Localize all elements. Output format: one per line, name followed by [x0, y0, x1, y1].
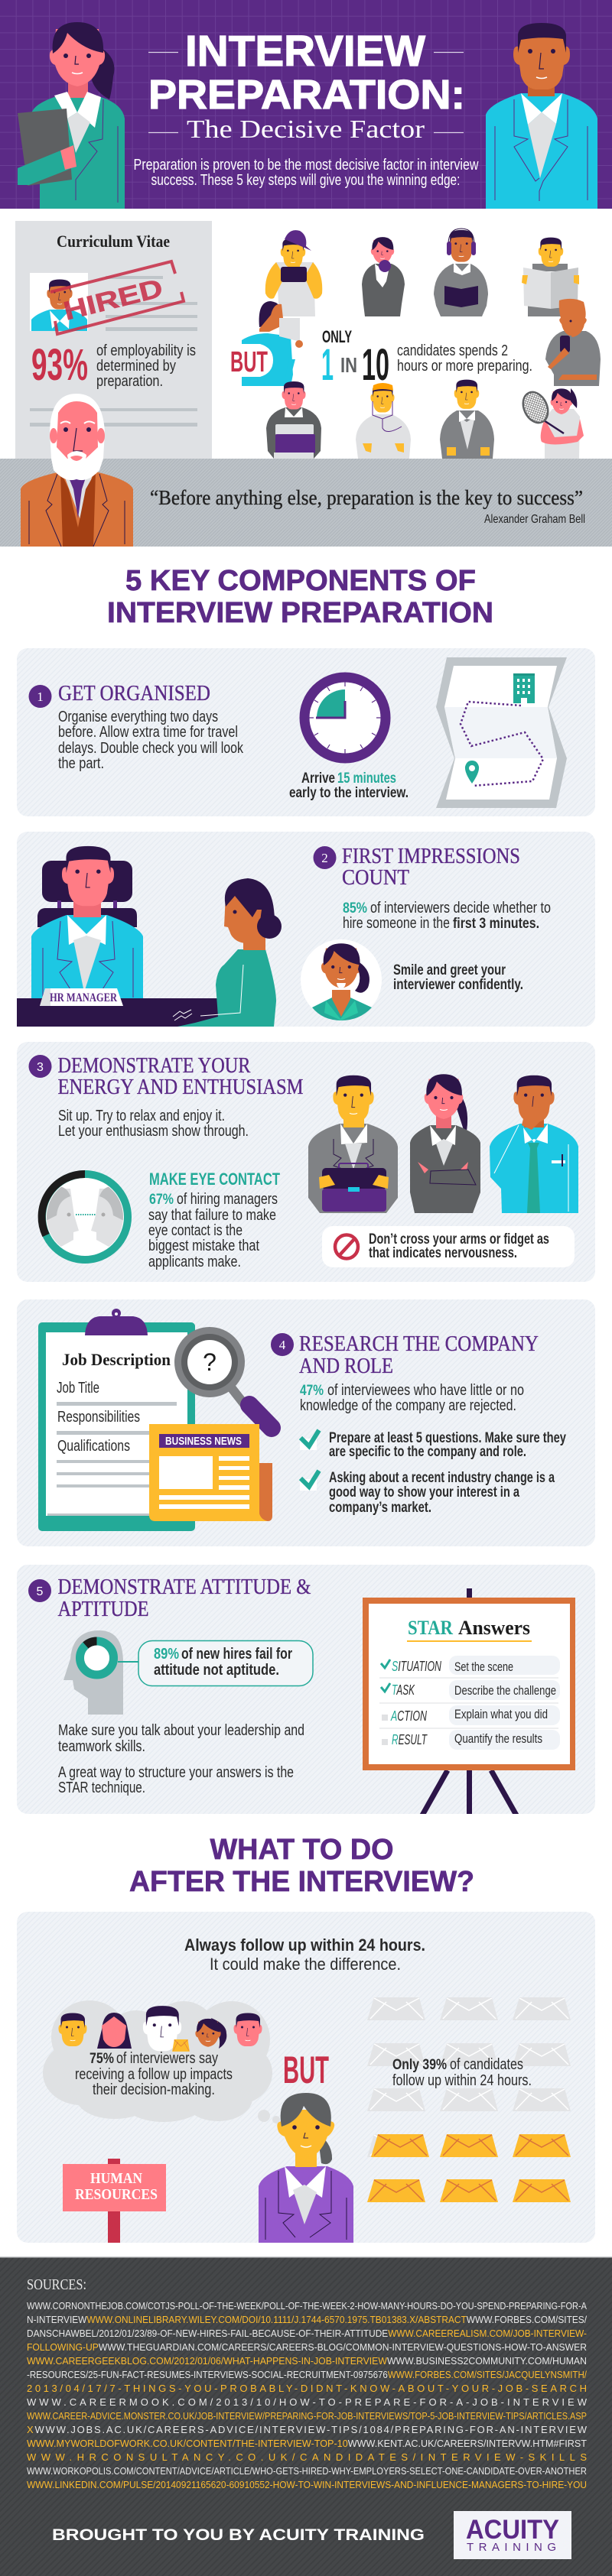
- clipboard: Job Title: [57, 1380, 99, 1397]
- title: INTERVIEW: [185, 27, 425, 76]
- map illustration: [436, 657, 567, 808]
- body text: Let your enthusiasm show through.: [58, 1123, 249, 1140]
- stat text: [343, 900, 551, 932]
- badge 5: [28, 1579, 51, 1602]
- source links: WWW.MYWORLDOFWORK.CO.UK/CONTENT/THE-INTERVIEW-TOP-10WWW.KENT.AC.UK/CAREERS/INTERVW.HTM#FIRST: [27, 2438, 587, 2449]
- nameplate: [40, 988, 123, 1006]
- star heading: Answers: [458, 1617, 530, 1639]
- stat: 39 percent: [392, 2056, 532, 2089]
- footer: sources: [0, 2256, 612, 2576]
- check: recent industry change: [300, 1471, 319, 1491]
- stat text: 85%: [343, 900, 367, 917]
- body text: [58, 1108, 249, 1140]
- face: orange woman: [195, 2018, 226, 2049]
- icon: no sign: [335, 1235, 358, 1258]
- person with tablet: [265, 230, 322, 316]
- quote band: [0, 394, 612, 547]
- badge 3: [29, 1055, 52, 1078]
- badge 2: 2: [321, 851, 328, 865]
- tip text: Smile and greet your: [393, 962, 506, 978]
- stat: only 1 in 10: ONLY: [322, 327, 352, 346]
- eye contact text: say that failure to make: [148, 1207, 276, 1224]
- portrait: alexander graham bell: [21, 394, 133, 547]
- panel: research the company: [17, 1299, 595, 1546]
- woman with microphone: [362, 237, 405, 316]
- stat: only 1 in 10: candidates spends 2: [397, 342, 508, 359]
- easel with star answers: [363, 1588, 575, 1819]
- row: action: ACTION: [390, 1708, 428, 1724]
- stat: 93 percent: determined by: [96, 358, 176, 375]
- magnifying glass: ?: [203, 1348, 216, 1376]
- thought bubble: [43, 2000, 280, 2123]
- logo: acuity training: ACUITY: [466, 2515, 559, 2545]
- body text: Make sure you talk about your leadership and: [58, 1722, 304, 1739]
- callout: don't cross your arms: that indicates nervousness.: [369, 1245, 517, 1261]
- stat text: knowledge of the company are rejected.: [300, 1397, 516, 1414]
- body text: [58, 1722, 304, 1796]
- callout: 89 percent: 89%: [154, 1646, 179, 1663]
- face: pink man: [234, 2013, 262, 2046]
- body text: STAR technique.: [58, 1780, 145, 1796]
- panel: follow up: [17, 1912, 595, 2243]
- source links: 2013/04/17/7-THINGS-YOU-PROBABLY-DIDNT-KNOW-ABOUT-YOUR-JOB-SEARCH: [27, 2383, 587, 2394]
- bubble text: their decision-making.: [93, 2081, 215, 2098]
- man with apron and case: [266, 381, 321, 459]
- bubble text: [75, 2050, 233, 2098]
- face: central man: [143, 2006, 181, 2051]
- stat: only 1 in 10: 10: [362, 340, 389, 390]
- newspaper: [149, 1424, 272, 1521]
- row: situation: Set the scene: [454, 1659, 513, 1674]
- body text: Organise everything two days: [58, 709, 218, 725]
- eye contact text: MAKE EYE CONTACT: [149, 1170, 280, 1189]
- heading: DEMONSTRATE YOUR: [58, 1054, 251, 1078]
- source links: N-INTERVIEWWWW.ONLINELIBRARY.WILEY.COM/DOI/10.1111/J.1744-6570.1975.TB01383.X/ABSTRACTWWW.FORBES.COM/SITES/: [27, 2314, 587, 2325]
- nameplate: HR MANAGER: [50, 991, 117, 1004]
- candidate photo: [30, 273, 88, 331]
- badge 4: [271, 1333, 294, 1356]
- stat text: 47%: [300, 1383, 324, 1399]
- heading: what to do after: AFTER THE INTERVIEW?: [129, 1866, 474, 1898]
- panel: attitude and aptitude: [17, 1565, 595, 1819]
- heading: [58, 1054, 304, 1099]
- lead text: [184, 1935, 425, 1974]
- stat: 93 percent: of employability is: [96, 342, 196, 359]
- tip text one: are specific to the company and role.: [329, 1444, 526, 1460]
- sign: human resources: RESOURCES: [75, 2186, 158, 2203]
- face: yellow: [58, 2013, 87, 2046]
- stat: 93 percent: [31, 340, 196, 390]
- magnifying glass: [174, 1327, 272, 1428]
- man with stethoscope: [356, 383, 411, 459]
- badge 1: 1: [37, 689, 44, 704]
- panel: energy and enthusiasm: [17, 1042, 595, 1282]
- heading: AND ROLE: [299, 1355, 393, 1378]
- cutout: but: BUT: [230, 346, 268, 378]
- man reading document: [230, 301, 303, 386]
- clipboard: [38, 1309, 195, 1531]
- intro paragraph: Preparation is proven to be the most decisive factor in interview: [133, 157, 479, 174]
- credit line: BROUGHT TO YOU BY ACUITY TRAINING: [52, 2526, 425, 2544]
- heading: 5 key components: 5 KEY COMPONENTS OF: [125, 565, 476, 597]
- heading: [58, 1575, 311, 1621]
- bubble text: of interviewers say: [116, 2050, 218, 2067]
- heading: what to do after: WHAT TO DO: [210, 1834, 393, 1866]
- stat: 93 percent: preparation.: [96, 373, 163, 390]
- star heading: STAR: [408, 1617, 453, 1639]
- bubble text: 75%: [90, 2051, 114, 2067]
- badge 2: [314, 846, 337, 869]
- row: result: [392, 1731, 542, 1747]
- heading: COUNT: [342, 866, 409, 890]
- clipboard: Job Description: [62, 1350, 171, 1369]
- body text: Sit up. Try to relax and enjoy it.: [58, 1108, 225, 1124]
- body text: delays. Double check you will look: [58, 740, 244, 757]
- callout: don't cross your arms: [322, 1226, 575, 1267]
- clipboard: Qualifications: [57, 1438, 130, 1455]
- stat: 93 percent: 93%: [31, 340, 88, 390]
- panel: get organised: [17, 648, 595, 816]
- quote text: “Before anything else, preparation is the key to success”: [150, 486, 583, 509]
- illustration: nervous candidate: [173, 878, 282, 1027]
- stat: 39 percent: of candidates: [450, 2056, 523, 2073]
- tip text one: [329, 1430, 566, 1460]
- clock icon: [304, 677, 386, 758]
- source links: WWW.CAREERMOOK.COM/2013/10/HOW-TO-PREPARE-FOR-A-JOB-INTERVIEW: [27, 2396, 588, 2408]
- heading: GET ORGANISED: [58, 682, 210, 706]
- heading: APTITUDE: [58, 1598, 148, 1621]
- heading: 5 key components: INTERVIEW PREPARATION: [107, 597, 493, 629]
- eye contact text: of hiring managers: [177, 1191, 278, 1208]
- row: result: Quantify the results: [454, 1731, 542, 1746]
- sign: human resources: HUMAN: [90, 2170, 142, 2187]
- row: task: [392, 1682, 556, 1698]
- intro paragraph: [133, 157, 479, 189]
- stat text: of interviewers decide whether to: [370, 900, 551, 917]
- quote attribution: Alexander Graham Bell: [484, 513, 585, 526]
- stamp: hired: [50, 261, 184, 334]
- heading: [299, 1332, 539, 1378]
- callout: 89 percent: of new hires fail for: [181, 1646, 292, 1663]
- tip text: [393, 962, 523, 993]
- source links: WWW.CAREERGEEKBLOG.COM/2012/01/06/WHAT-HAPPENS-IN-JOB-INTERVIEWWWW.BUSINESS2COMMUNITY.COM/HUMAN: [27, 2355, 587, 2367]
- star heading: [407, 1617, 532, 1642]
- stat text: hire someone in the: [343, 915, 450, 932]
- check: prepare questions: [300, 1430, 319, 1450]
- tip text two: [329, 1470, 555, 1516]
- clipboard: Responsibilities: [57, 1409, 140, 1426]
- illustration: woman with crossed arms: [410, 1074, 480, 1213]
- label: but: BUT: [283, 2049, 329, 2091]
- envelopes grid: [367, 1997, 571, 2202]
- man with headphones and book: [434, 229, 488, 316]
- body text: A great way to structure your answers is the: [58, 1764, 294, 1781]
- illustration: man with briefcase: [308, 1075, 398, 1213]
- heading: ENERGY AND ENTHUSIASM: [58, 1075, 304, 1099]
- clock caption: Arrive: [301, 771, 335, 787]
- clock caption: early to the interview.: [289, 785, 409, 801]
- face: pink woman: [97, 2013, 132, 2049]
- bubble text: receiving a follow up impacts: [75, 2066, 233, 2083]
- stat: only 1 in 10: hours or more preparing.: [397, 358, 532, 375]
- panel: curriculum vitae: [15, 221, 212, 459]
- location pin: [465, 761, 479, 784]
- heading: RESEARCH THE COMPANY: [299, 1332, 539, 1356]
- woman with tennis racket: [519, 388, 584, 459]
- intro paragraph: success. These 5 key steps will give you the winning edge:: [151, 172, 461, 189]
- stat text: first 3 minutes.: [453, 916, 539, 932]
- sign: human resources: [63, 2159, 166, 2243]
- illustration: hr manager: [31, 846, 143, 1001]
- panel: first impressions: [17, 832, 595, 1027]
- desk: [17, 998, 219, 1027]
- eye contact text: [148, 1170, 280, 1270]
- header banner: [0, 0, 612, 209]
- heading: DEMONSTRATE ATTITUDE &: [58, 1575, 311, 1599]
- eye contact text: 67%: [149, 1192, 174, 1208]
- tip text two: good way to show your interest in a: [329, 1484, 519, 1501]
- illustration: man in blue suit: [486, 23, 597, 209]
- row: task: TASK: [392, 1682, 415, 1698]
- illustration: thoughtful man: [490, 1075, 578, 1213]
- eye contact text: biggest mistake that: [148, 1238, 259, 1254]
- title: The Decisive Factor: [187, 115, 425, 144]
- callout: don't cross your arms: Don’t cross your arms or fidget as: [369, 1231, 549, 1247]
- illustration: thinking woman: [259, 2093, 353, 2243]
- stat: only 1 in 10: 1: [321, 340, 334, 390]
- illustration: smiling candidate: [301, 939, 382, 1020]
- heading: [342, 845, 520, 890]
- stat text: of interviewees who have little or no: [327, 1382, 524, 1399]
- logo: acuity training: [454, 2511, 571, 2559]
- lead text: Always follow up within 24 hours.: [184, 1935, 425, 1955]
- source links: WWW.HRCONSULTANCY.CO.UK/CANDIDATES/INTERVIEW-SKILLS: [27, 2451, 587, 2463]
- source links: -RESOURCES/25-FUN-FACT-RESUMES-INTERVIEWS-SOCIAL-RECRUITMENT-0975676WWW.FORBES.COM/SITES/JACQUELYNSMITH/: [27, 2369, 587, 2380]
- source links: XWWW.JOBS.AC.UK/CAREERS-ADVICE/INTERVIEW-TIPS/1084/PREPARING-FOR-AN-INTERVIEW: [27, 2424, 588, 2435]
- tip text two: company’s market.: [329, 1500, 431, 1516]
- newspaper: BUSINESS NEWS: [165, 1435, 242, 1448]
- illustration: crowd of candidates: [230, 229, 601, 459]
- source links: [27, 2300, 588, 2490]
- heading: sources: SOURCES:: [27, 2276, 86, 2293]
- row: task: Describe the challenge: [454, 1683, 556, 1698]
- clock caption: [289, 771, 409, 801]
- eye contact chart: [42, 1174, 128, 1261]
- stat: 39 percent: follow up within 24 hours.: [392, 2072, 532, 2089]
- stat text: [300, 1382, 524, 1414]
- lead text: It could make the difference.: [210, 1955, 401, 1974]
- title: [148, 27, 465, 144]
- body text: before. Allow extra time for travel: [58, 724, 238, 741]
- source links: DANSCHAWBEL/2012/01/23/89-OF-NEW-HIRES-FAIL-BECAUSE-OF-THEIR-ATTITUDEWWW.CAREEREALISM.COM/JOB-INTERVIEW-: [27, 2328, 587, 2339]
- icon: mini envelope: [172, 2039, 190, 2052]
- eye contact text: applicants make.: [148, 1254, 241, 1270]
- stamp: hired: HIRED: [60, 274, 166, 326]
- building icon: [513, 673, 535, 703]
- logo: acuity training: TRAINING: [467, 2541, 556, 2554]
- row: result: RESULT: [392, 1732, 428, 1747]
- heading: curriculum vitae: Curriculum Vitae: [57, 232, 170, 251]
- tip text: interviewer confidently.: [393, 977, 523, 993]
- callout: 89 percent: [118, 1640, 313, 1686]
- eye contact text: eye contact is the: [148, 1222, 243, 1239]
- illustration: woman with folder: [18, 22, 125, 209]
- man in grey suit: [440, 380, 494, 459]
- row: action: [390, 1707, 548, 1724]
- row: action: Explain what you did: [454, 1707, 548, 1721]
- heading: what to do after: [129, 1834, 474, 1898]
- title: PREPARATION:: [148, 72, 465, 118]
- stat: 39 percent: Only 39%: [392, 2057, 447, 2073]
- man with newspaper: [522, 238, 579, 316]
- row: situation: SITUATION: [392, 1659, 442, 1674]
- row: situation: [392, 1659, 513, 1674]
- stat: only 1 in 10: IN: [340, 353, 357, 377]
- clock caption: 15 minutes: [337, 771, 396, 787]
- badge 1: [29, 685, 52, 708]
- head and donut chart: [63, 1630, 123, 1715]
- body text: [58, 709, 244, 772]
- badge 4: 4: [279, 1338, 286, 1352]
- body text: the part.: [58, 755, 104, 772]
- source links: FOLLOWING-UPWWW.THEGUARDIAN.COM/CAREERS/CAREERS-BLOG/COMMON-INTERVIEW-QUESTIONS-HOW-TO-ANSWER: [27, 2341, 587, 2353]
- heading: FIRST IMPRESSIONS: [342, 845, 520, 868]
- bald man with phone: [545, 299, 601, 386]
- badge 5: 5: [37, 1585, 44, 1598]
- stat: only 1 in 10: [321, 327, 532, 390]
- body text: teamwork skills.: [58, 1738, 145, 1755]
- callout: 89 percent: attitude not aptitude.: [154, 1662, 279, 1679]
- heading: 5 key components: [107, 565, 493, 629]
- badge 3: 3: [37, 1061, 44, 1074]
